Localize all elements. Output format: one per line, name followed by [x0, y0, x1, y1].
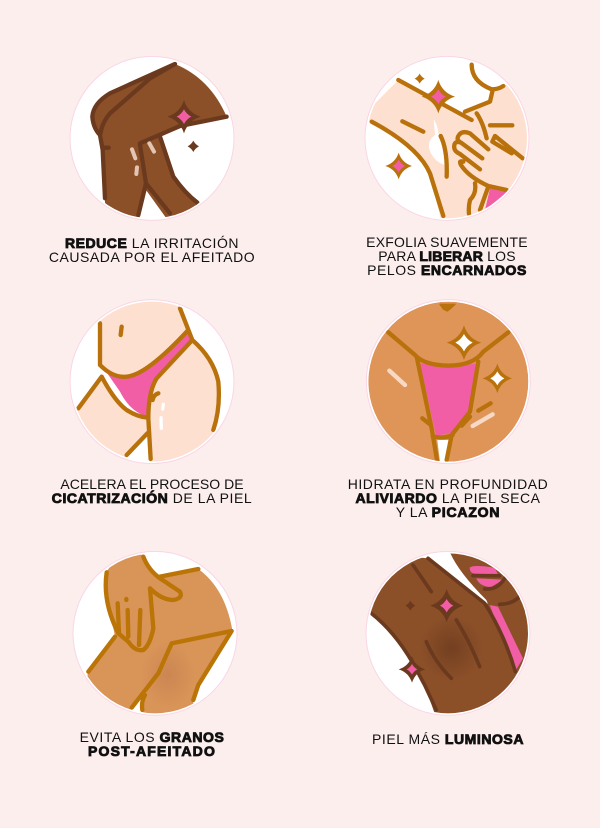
panel: underarm illustration [365, 551, 545, 718]
text: acelera: ACELERA EL PROCESO DE [60, 476, 244, 492]
icon: small sparkle [405, 601, 415, 611]
illustrations [70, 56, 531, 716]
hand [454, 132, 523, 188]
icon: sparkle [483, 364, 512, 393]
white marks [161, 404, 163, 428]
navel [440, 304, 455, 311]
pale marks [132, 143, 154, 174]
panel: knee illustration [70, 56, 234, 223]
arm [370, 558, 528, 714]
text: evita [80, 729, 224, 759]
text: hidrata [348, 476, 548, 520]
pink underwear [420, 363, 476, 436]
white gap [437, 440, 449, 462]
text: piel: PIEL MÁS LUMINOSA [372, 731, 524, 747]
pink nails [470, 566, 503, 587]
pink underwear [108, 334, 190, 416]
text: reduce: REDUCE LA IRRITACIÓN [65, 235, 239, 251]
bruise [430, 626, 472, 670]
cream [429, 119, 446, 165]
leg outlines [92, 64, 227, 215]
text: reduce [49, 235, 255, 265]
text: hidrata: Y LA PICAZON [396, 504, 500, 520]
panel: pink underwear illustration [70, 295, 234, 468]
skin [369, 82, 527, 218]
pale marks [389, 371, 493, 426]
panel: exfoliating hand illustration [364, 56, 530, 221]
icon: sparkle [447, 325, 481, 360]
icon: sparkle [422, 80, 455, 113]
text: reduce: CAUSADA POR EL AFEITADO [49, 249, 255, 265]
text: exfolia [366, 234, 528, 278]
outlines [371, 558, 521, 710]
shade [157, 661, 180, 690]
skin: left leg [78, 380, 147, 458]
outlines [388, 332, 508, 460]
outlines [88, 569, 232, 710]
hand [450, 554, 525, 612]
text: acelera [52, 476, 252, 506]
pink strap [490, 605, 523, 671]
upper thigh [88, 570, 232, 710]
text: hidrata: ALIVIARDO LA PIEL SECA [355, 490, 541, 506]
dark leg [92, 64, 227, 223]
outlines [78, 308, 219, 459]
text: acelera: CICATRIZACIÓN DE LA PIEL [52, 490, 252, 506]
pink underwear [485, 188, 508, 210]
panel: tan underwear illustration [366, 300, 530, 464]
icon: sparkle [167, 100, 201, 133]
icon: small sparkle [188, 141, 199, 152]
outlines [372, 65, 512, 216]
lower leg [143, 634, 227, 714]
icon: sparkle [430, 589, 463, 622]
text: exfolia: EXFOLIA SUAVEMENTE [366, 234, 528, 250]
hand [107, 554, 156, 601]
skin: belly [100, 302, 186, 375]
text: hidrata: HIDRATA EN PROFUNDIDAD [348, 476, 548, 492]
icon: sparkle [399, 656, 425, 683]
text: exfolia: PELOS ENCARNADOS [367, 262, 527, 278]
text: evita: EVITA LOS GRANOS [80, 729, 224, 745]
skin: right thigh [150, 343, 217, 462]
text: exfolia: PARA LIBERAR LOS [378, 248, 516, 264]
panel: hand on thigh illustration [73, 551, 237, 718]
icon: sparkle [385, 153, 412, 179]
icon: small sparkle [415, 74, 425, 84]
skin [368, 302, 528, 462]
text: evita: POST-AFEITADO [88, 743, 216, 759]
